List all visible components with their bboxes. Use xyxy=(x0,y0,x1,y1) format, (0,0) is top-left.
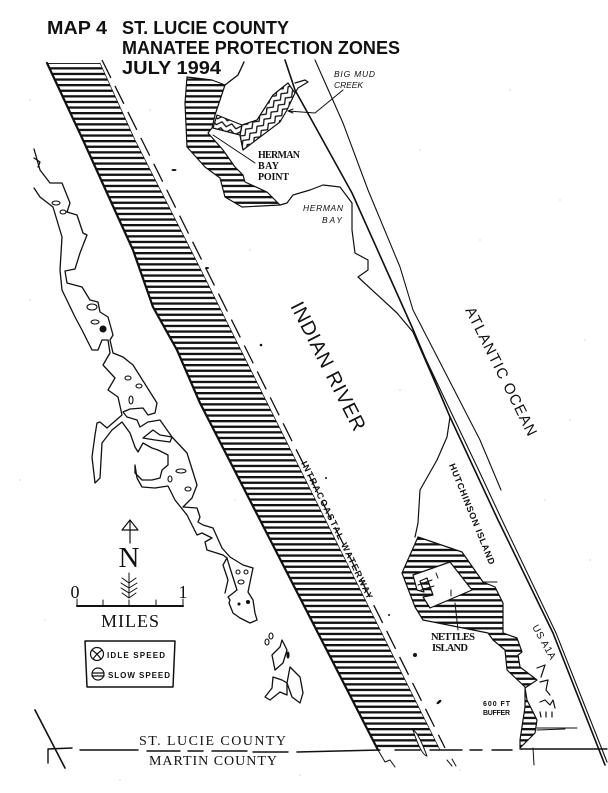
label: herman bay point: BAY xyxy=(258,161,280,172)
legend labels xyxy=(107,651,170,680)
scattered dots in river xyxy=(172,169,442,705)
title: JULY 1994 xyxy=(122,58,221,78)
icon: slow speed xyxy=(92,668,104,680)
small islands xyxy=(52,201,303,703)
label: atlantic ocean: ATLANTIC OCEAN xyxy=(461,304,540,439)
title: MANATEE PROTECTION ZONES xyxy=(122,38,400,58)
legend labels: SLOW SPEED xyxy=(108,671,170,680)
label: herman bay point: HERMAN xyxy=(258,150,301,161)
nettles island slow speed zone xyxy=(402,537,537,748)
label: big mud creek xyxy=(334,69,375,90)
label: us a1a: US A1A xyxy=(529,623,558,662)
arrow: big mud creek xyxy=(288,90,343,113)
title: MAP 4 xyxy=(47,18,107,38)
label: 600 ft buffer: BUFFER xyxy=(483,710,510,717)
north arrow: N xyxy=(119,542,140,574)
title xyxy=(47,18,400,78)
herman bay point slow speed zone xyxy=(185,77,280,207)
label: nettles island: NETTLES xyxy=(431,632,475,643)
nettles island development xyxy=(413,562,472,608)
legend xyxy=(85,641,175,687)
label: intracoastal waterway: INTRACOASTAL WATERWAY xyxy=(299,459,375,600)
docks near county line xyxy=(537,665,577,730)
county line xyxy=(35,710,607,768)
dashed waterway line xyxy=(102,60,445,748)
eastern river shoreline xyxy=(280,185,450,537)
label: 600 ft buffer xyxy=(483,701,511,717)
label: herman bay point: POINT xyxy=(258,172,289,183)
scale bar: MILES xyxy=(101,611,159,631)
label: nettles island: ISLAND xyxy=(432,643,468,654)
county labels xyxy=(139,734,286,769)
icon: idle speed xyxy=(90,648,104,660)
barrier island outer shoreline xyxy=(315,60,501,490)
label: herman bay: BAY xyxy=(322,215,343,225)
arrow: herman bay point xyxy=(213,135,255,163)
western mainland shoreline xyxy=(34,149,257,623)
big mud creek idle speed zone xyxy=(213,80,308,150)
title: ST. LUCIE COUNTY xyxy=(122,18,289,38)
intracoastal waterway slow speed channel xyxy=(47,63,440,750)
legend labels: IDLE SPEED xyxy=(107,651,165,660)
label: herman bay point xyxy=(258,150,301,183)
label: herman bay: HERMAN xyxy=(303,203,344,213)
label: 600 ft buffer: 600 FT xyxy=(483,701,511,708)
oval marker across channel xyxy=(413,730,427,756)
label: indian river: INDIAN RIVER xyxy=(286,298,370,435)
road us a1a xyxy=(285,60,607,765)
north arrow xyxy=(119,520,140,598)
upper shoreline inlet xyxy=(225,62,244,85)
label: big mud creek: BIG MUD xyxy=(334,69,375,79)
scale bar: 0 xyxy=(70,582,80,602)
scale bar xyxy=(70,582,188,631)
label: nettles island xyxy=(431,632,475,654)
label: hutchinson island: HUTCHINSON ISLAND xyxy=(447,462,497,566)
scale bar: 1 xyxy=(178,582,188,602)
label: big mud creek: CREEK xyxy=(334,80,363,90)
county labels: MARTIN COUNTY xyxy=(149,754,277,769)
county labels: ST. LUCIE COUNTY xyxy=(139,734,286,749)
label: herman bay xyxy=(303,203,344,225)
